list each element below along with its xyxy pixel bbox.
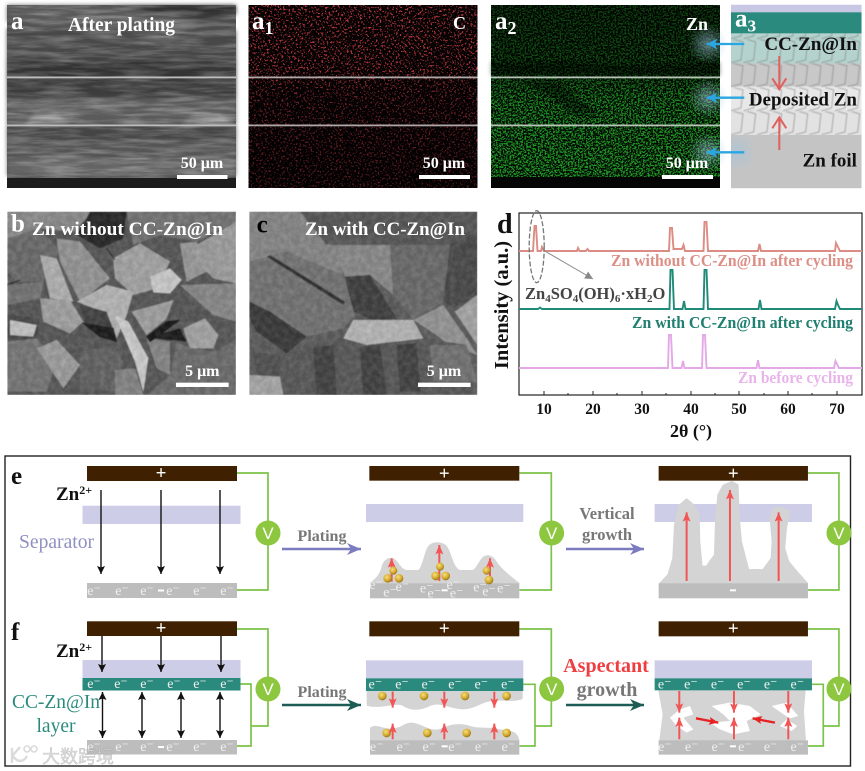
scale bar: 5 μm [418,363,471,387]
layer label: CC-Zn@In: CC-Zn@In [764,34,857,55]
cell f1: before plating: V [262,680,274,699]
panel label: a1: 1 [264,18,274,38]
cell f3: aspectant growth: e⁻ [658,677,671,692]
cell f2: bidirectional deposition [366,618,564,755]
cell e1: before plating: + [156,463,166,484]
scale bar: 50 μm [177,155,228,179]
cell e1: before plating: e⁻ [166,584,180,599]
cell f2: bidirectional deposition: V [546,680,558,699]
label: CC-Zn@In layer: layer [37,716,76,737]
cell e1: before plating: V [262,524,274,543]
scale bar: 50 μm: 50 μm [181,155,224,172]
cell e2: nucleation: + [439,463,450,484]
label: CC-Zn@In layer [12,692,100,737]
watermark: 大数跨境 [42,743,114,769]
cell f1: before plating: e⁻ [167,677,181,692]
arrow: Plating [282,704,361,706]
cell f3: aspectant growth: e⁻ [684,677,698,692]
step label: Vertical growth: growth [582,525,632,544]
x tick labels: 30 [634,401,650,418]
cell f1: before plating: e⁻ [193,677,207,692]
annotation arrow [543,250,593,279]
panel label: a3: 3 [747,17,756,36]
cell f1: before plating: e⁻ [87,740,101,755]
trace label: before: Zn before cycling [738,368,854,387]
trace: without CC-Zn@In [519,222,862,251]
cell f3: aspectant growth: e⁻ [711,677,724,692]
cell f1: before plating: e⁻ [220,677,234,692]
cell e1: before plating [82,463,280,599]
cell f2: bidirectional deposition: e⁻ [501,677,515,692]
cell e1: before plating: e⁻ [87,584,101,599]
panel a3: deposition schematic [707,5,862,188]
cell f2: bidirectional deposition: e⁻ [448,740,462,755]
cell f3: aspectant growth: + [728,618,739,639]
label: CC-Zn@In layer: CC-Zn@In [12,692,100,713]
cell e2: nucleation: e⁻ [482,585,496,600]
cell f3: aspectant growth: e⁻ [737,677,751,692]
x tick labels: 40 [683,401,699,418]
caption: Zn without CC-Zn@In: Zn without CC-Zn@In [32,219,223,240]
label: Zn2+: 2+ [79,640,92,654]
label: Zn2+: Zn [56,641,79,662]
caption: After plating: After plating [68,15,175,36]
cell e2: nucleation: e⁻ [369,578,383,593]
cell e2: nucleation: V [546,524,558,543]
cell f2: bidirectional deposition: e⁻ [370,740,383,755]
compound label: 4 [573,293,579,305]
panel label: a: a [11,8,24,35]
layer label: Deposited Zn: Deposited Zn [749,90,857,111]
cell e1: before plating: e⁻ [140,584,154,599]
x tick labels: 10 [536,401,552,418]
scale bar: 50 μm [419,155,470,179]
cell f1: before plating: e⁻ [140,740,154,755]
compound label: ·xH [620,284,647,303]
label: Zn2+: Zn [56,484,79,505]
cell f2: bidirectional deposition: e⁻ [422,677,435,692]
panel label: e: e [11,463,22,490]
trace: before cycling [519,335,862,368]
cell f1: before plating: e⁻ [193,740,207,755]
cell f1: before plating: e⁻ [220,740,234,755]
cell f3: aspectant growth: e⁻ [738,740,752,755]
cell f2: bidirectional deposition: e⁻ [395,677,409,692]
x tick labels: 50 [731,401,747,418]
element label: C: C [453,13,466,33]
cell f2: bidirectional deposition: e⁻ [502,740,515,755]
x tick labels: 70 [829,401,845,418]
caption: Zn with CC-Zn@In: Zn with CC-Zn@In [305,219,465,240]
trace label: without: Zn without CC-Zn@In after cycling [611,251,854,270]
cell f1: before plating: e⁻ [166,740,180,755]
panel a1: carbon map [248,5,478,188]
cell e3: dendrites: + [728,463,739,484]
cell f1: before plating: e⁻ [115,740,129,755]
cell f3: aspectant growth: e⁻ [685,740,698,755]
x axis label: 2θ (°) [670,421,712,442]
cell f2: bidirectional deposition: e⁻ [423,740,436,755]
cell f3: aspectant growth: e⁻ [658,740,672,755]
blue arrows [707,44,744,152]
cell f1: before plating [82,618,280,755]
scale bar: 5 μm: 5 μm [185,363,220,380]
cell f2: bidirectional deposition: e⁻ [475,740,488,755]
panel label: d: d [497,209,513,240]
cell f2: bidirectional deposition: + [439,618,450,639]
cell f2: bidirectional deposition: e⁻ [397,740,410,755]
label: Zn2+: 2+ [79,483,92,497]
cell f1: before plating: e⁻ [87,677,101,692]
step label: Aspectant growth: Aspectant [563,655,649,677]
row f: with CC-Zn@In [11,618,851,755]
panel label: f: f [11,619,20,646]
arrow: Plating [282,548,361,550]
cell e1: before plating: e⁻ [193,584,207,599]
layer label: Zn foil: Zn foil [803,151,857,172]
cell e2: nucleation: e⁻ [447,578,460,593]
scale bar: 50 μm: 50 μm [666,155,709,172]
step label: Vertical growth: Vertical [579,504,635,523]
cell f1: before plating: + [156,618,166,639]
scale bar: 5 μm: 5 μm [427,363,462,380]
cell e1: before plating: e⁻ [220,584,234,599]
trace: with CC-Zn@In [519,270,862,309]
arrow: Vertical growth [566,548,644,550]
red arrows [772,56,786,150]
panel label: b: b [11,211,25,238]
cell f3: aspectant growth: e⁻ [764,677,777,692]
panel d: XRD chart [491,209,862,442]
scale bar: 5 μm [176,363,229,387]
step label: Aspectant growth [563,655,649,701]
cell e2: nucleation: e⁻ [473,581,487,596]
compound label: 6 [615,293,621,305]
y axis label: Intensity (a.u.) [491,241,513,369]
cell e3: dendrites [655,463,851,598]
step label: Aspectant growth: growth [577,679,637,701]
cell f3: aspectant growth: e⁻ [711,740,725,755]
compound label: O [652,284,665,303]
compound label: Zn [525,284,545,303]
cell f2: bidirectional deposition: e⁻ [475,677,488,692]
panel label: a3: a [735,6,747,33]
element label: Zn: Zn [686,14,708,34]
panel label: c: c [257,211,268,238]
compound label: SO [551,284,573,303]
cell f3: aspectant growth: e⁻ [764,740,777,755]
cell f2: bidirectional deposition: e⁻ [448,677,462,692]
cell e2: nucleation: e⁻ [396,580,409,595]
panel label: a2: a [495,8,508,35]
annotation ellipse [529,211,544,283]
panel frame: schematics e and f [5,456,850,766]
step label: Plating: Plating [298,684,346,701]
chart frame [519,213,862,395]
cell e2: nucleation: e⁻ [383,586,397,601]
cell e2: nucleation: e⁻ [450,587,463,602]
x tick labels [536,401,845,418]
cell e3: dendrites: V [833,524,845,543]
cell e1: before plating: e⁻ [115,584,129,599]
compound label: (OH) [578,284,615,303]
cell f3: aspectant growth: e⁻ [790,740,804,755]
compound label: 2 [647,293,653,305]
cell f1: before plating: e⁻ [140,677,154,692]
cell f3: aspectant growth: e⁻ [790,677,804,692]
cell f3: aspectant growth [655,618,851,755]
cell e2: nucleation [366,463,564,602]
compound label: 4 [545,293,551,305]
panel a2: zinc map [491,5,728,188]
cell f3: aspectant growth: V [833,680,845,699]
panel b: SEM Zn without CC-Zn@In [7,211,236,395]
trace label: with: Zn with CC-Zn@In after cycling [632,313,854,332]
panel c: SEM Zn with CC-Zn@In [249,211,477,395]
panel a: SEM after plating [7,5,236,188]
cell f1: before plating: e⁻ [114,677,128,692]
scale bar: 50 μm: 50 μm [423,155,466,172]
row e: without CC-Zn@In [11,463,851,602]
cell e2: nucleation: e⁻ [420,582,433,597]
arrow: Aspectant growth [566,704,644,706]
step label: Vertical growth [579,504,635,544]
scale bar: 50 μm [662,155,713,179]
panel label: a2: 2 [508,18,516,38]
cell e2: nucleation: e⁻ [497,581,511,596]
x tick labels: 20 [585,401,601,418]
panel label: a1: a [252,8,264,35]
cell e2: nucleation: e⁻ [428,586,441,601]
x tick labels: 60 [780,401,796,418]
cell f2: bidirectional deposition: e⁻ [369,677,382,692]
step label: Plating: Plating [298,528,346,545]
label: Separator: Separator [19,532,95,553]
